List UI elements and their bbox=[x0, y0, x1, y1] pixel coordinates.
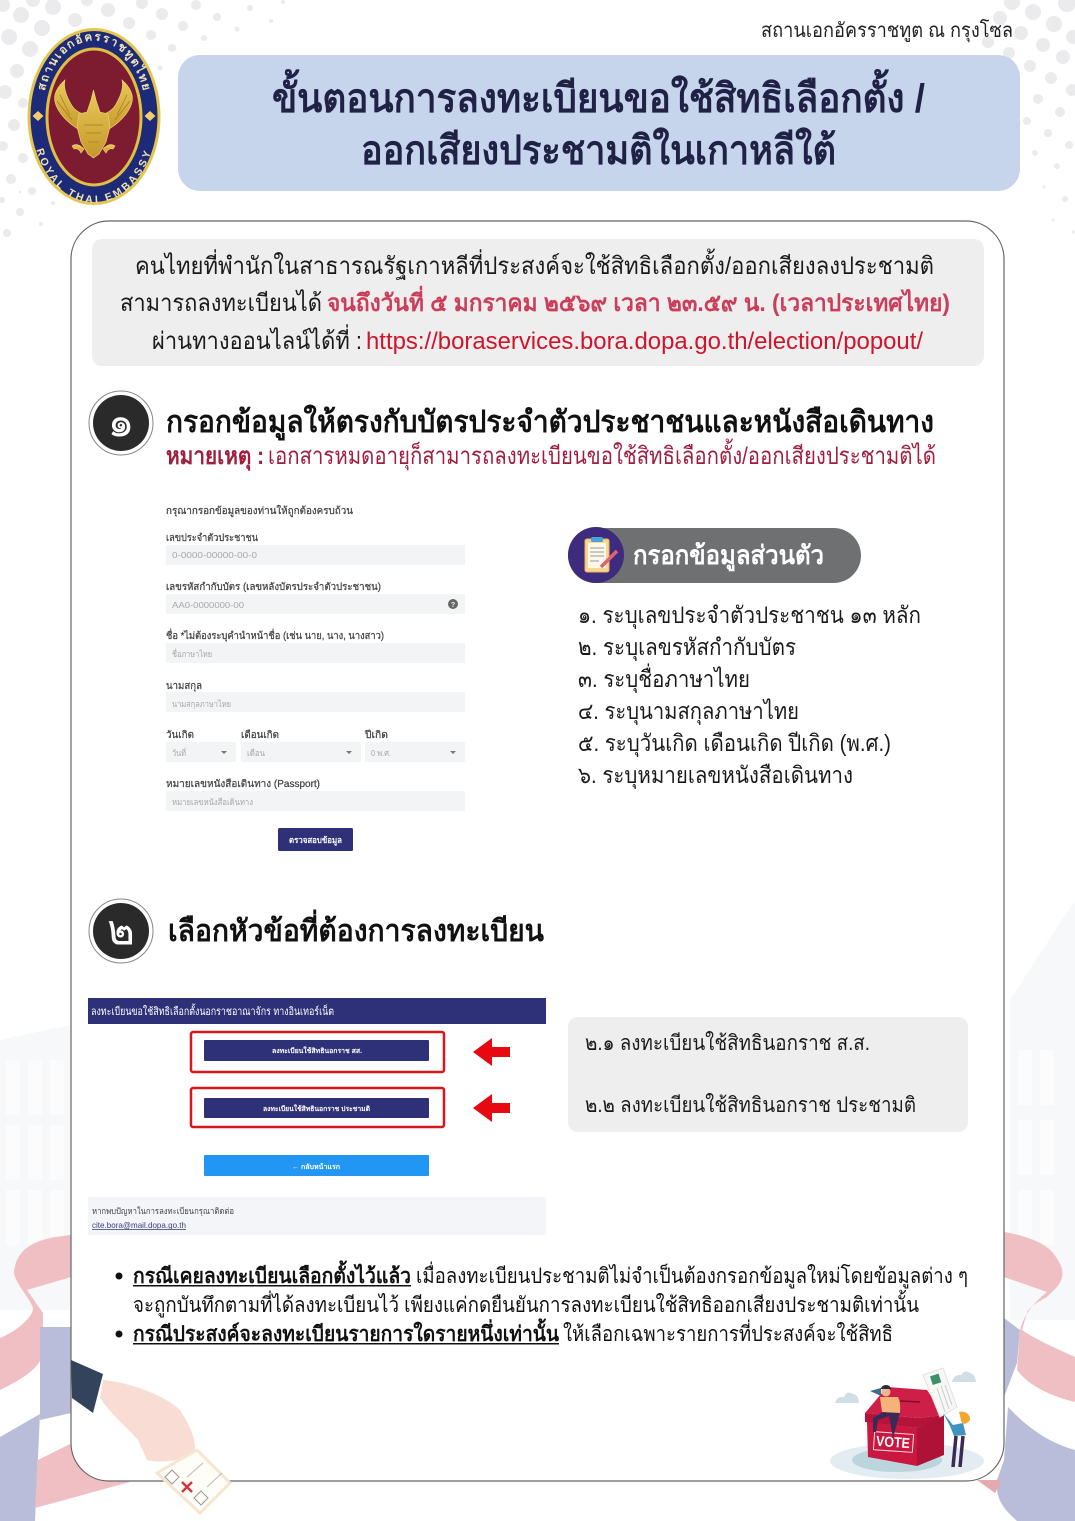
illustration: hand with ballot bbox=[71, 1360, 230, 1513]
intro box: สามารถลงทะเบียนได้ bbox=[120, 289, 322, 317]
registration screenshot: ← กลับหน้าแรก bbox=[292, 1162, 340, 1171]
form screenshot: นามสกุลภาษาไทย bbox=[172, 699, 231, 710]
embassy logo: ROYAL THAI EMBASSY bbox=[36, 148, 150, 203]
personal info list bbox=[578, 602, 921, 789]
options box: ๒.๒ ลงทะเบียนใช้สิทธินอกราช ประชามติ bbox=[585, 1093, 916, 1117]
title banner: ขั้นตอนการลงทะเบียนขอใช้สิทธิเลือกตั้ง / bbox=[272, 69, 925, 121]
notes: จะถูกบันทึกตามที่ได้ลงทะเบียนไว้ เพียงแค่กดยืนยันการลงทะเบียนใช้สิทธิออกเสียงประชามติเท่านั้น bbox=[133, 1290, 919, 1318]
intro box: https://boraservices.bora.dopa.go.th/election/popout/ bbox=[366, 328, 923, 355]
notes: ให้เลือกเฉพาะรายการที่ประสงค์จะใช้สิทธิ bbox=[563, 1319, 893, 1346]
registration screenshot: cite.bora@mail.dopa.go.th bbox=[92, 1220, 186, 1230]
registration screenshot: ลงทะเบียนขอใช้สิทธิเลือกตั้งนอกราชอาณาจักร ทางอินเทอร์เน็ต bbox=[91, 1003, 334, 1018]
registration screenshot: ลงทะเบียนใช้สิทธินอกราช ประชามติ bbox=[263, 1104, 370, 1113]
title banner: ออกเสียงประชามติในเกาหลีใต้ bbox=[361, 127, 836, 173]
garuda emblem bbox=[55, 80, 132, 158]
title banner bbox=[178, 55, 1020, 191]
form screenshot: วันเกิด bbox=[166, 730, 194, 741]
arrow 1 bbox=[473, 1038, 510, 1066]
background: faint buildings bbox=[0, 900, 1075, 1320]
form screenshot: ชื่อภาษาไทย bbox=[172, 648, 212, 659]
form screenshot: เลขประจำตัวประชาชน bbox=[166, 533, 258, 544]
illustration: vote box bbox=[830, 1368, 984, 1479]
step 2 badge: ๒ bbox=[107, 906, 135, 953]
notes: กรณีเคยลงทะเบียนเลือกตั้งไว้แล้ว bbox=[133, 1260, 411, 1288]
notes: เมื่อลงทะเบียนประชามติไม่จำเป็นต้องกรอกข้อมูลใหม่โดยข้อมูลต่าง ๆ bbox=[416, 1261, 968, 1289]
embassy logo: สถานเอกอัครราชทูตไทย bbox=[38, 33, 150, 90]
notes: กรณีประสงค์จะลงทะเบียนรายการใดรายหนึ่งเท่านั้น bbox=[133, 1318, 560, 1346]
step 1 note bbox=[166, 438, 936, 472]
personal info list: ๔. ระบุนามสกุลภาษาไทย bbox=[578, 698, 799, 725]
background: ribbon right bbox=[977, 1232, 1075, 1521]
personal info list: ๕. ระบุวันเกิด เดือนเกิด ปีเกิด (พ.ศ.) bbox=[578, 730, 891, 757]
step 1 note: เอกสารหมดอายุก็สามารถลงทะเบียนขอใช้สิทธิเลือกตั้ง/ออกเสียงประชามติได้ bbox=[268, 438, 936, 471]
background: ribbon left bbox=[0, 1235, 130, 1521]
registration screenshot: หากพบปัญหาในการลงทะเบียนกรุณาติดต่อ bbox=[92, 1206, 234, 1217]
form screenshot: เดือน bbox=[247, 748, 265, 758]
illustration: vote box: VOTE bbox=[875, 1434, 911, 1452]
ballot sheet bbox=[923, 1368, 957, 1417]
form screenshot: หมายเลขหนังสือเดินทาง bbox=[172, 797, 253, 807]
form screenshot: กรุณากรอกข้อมูลของท่านให้ถูกต้องครบถ้วน bbox=[166, 505, 353, 517]
intro box: จนถึงวันที่ ๕ มกราคม ๒๕๖๙ เวลา ๒๓.๕๙ น. (เวลาประเทศไทย) bbox=[327, 285, 950, 317]
form screenshot: 0-0000-00000-00-0 bbox=[172, 550, 257, 560]
personal info list: ๓. ระบุชื่อภาษาไทย bbox=[578, 663, 750, 693]
form screenshot bbox=[166, 505, 465, 851]
intro box: ผ่านทางออนไลน์ได้ที่ : bbox=[152, 324, 362, 355]
step 2 badge bbox=[89, 899, 153, 963]
person with ballot bbox=[943, 1413, 966, 1436]
arrow 2 bbox=[473, 1094, 510, 1122]
options box: ๒.๑ ลงทะเบียนใช้สิทธินอกราช ส.ส. bbox=[585, 1031, 870, 1055]
intro box: คนไทยที่พำนักในสาธารณรัฐเกาหลีที่ประสงค์จะใช้สิทธิเลือกตั้ง/ออกเสียงลงประชามติ bbox=[135, 248, 934, 280]
form screenshot: นามสกุล bbox=[166, 681, 202, 692]
registration screenshot bbox=[88, 998, 546, 1235]
personal info list: ๒. ระบุเลขรหัสกำกับบัตร bbox=[578, 634, 796, 661]
main card bbox=[71, 221, 1004, 1481]
form screenshot: ชื่อ *ไม่ต้องระบุคำนำหน้าชื่อ (เช่น นาย, นาง, นางสาว) bbox=[166, 628, 384, 642]
registration screenshot: ลงทะเบียนใช้สิทธินอกราช สส. bbox=[272, 1046, 362, 1055]
embassy logo bbox=[28, 28, 160, 205]
form screenshot: ตรวจสอบข้อมูล bbox=[289, 835, 342, 846]
form screenshot: เดือนเกิด bbox=[241, 729, 279, 741]
personal info pill: กรอกข้อมูลส่วนตัว bbox=[633, 540, 824, 572]
form screenshot: ปีเกิด bbox=[364, 729, 388, 741]
form screenshot: หมายเลขหนังสือเดินทาง (Passport) bbox=[166, 778, 320, 790]
step 1 heading: กรอกข้อมูลให้ตรงกับบัตรประจำตัวประชาชนและหนังสือเดินทาง bbox=[166, 404, 934, 441]
ballot paper bbox=[157, 1450, 230, 1513]
notes bbox=[116, 1260, 968, 1346]
intro box bbox=[92, 239, 984, 366]
personal info list: ๑. ระบุเลขประจำตัวประชาชน ๑๓ หลัก bbox=[578, 602, 921, 629]
step 1 badge: ๑ bbox=[108, 398, 134, 445]
person with megaphone bbox=[873, 1411, 900, 1438]
form screenshot: เลขรหัสกำกับบัตร (เลขหลังบัตรประจำตัวประชาชน) bbox=[166, 582, 381, 593]
form screenshot: วันที่ bbox=[172, 747, 186, 758]
icon: clipboard bbox=[585, 537, 617, 572]
top-right label: สถานเอกอัครราชทูต ณ กรุงโซล bbox=[761, 19, 1013, 43]
personal info list: ๖. ระบุหมายเลขหนังสือเดินทาง bbox=[578, 762, 853, 789]
form screenshot: 0 พ.ศ. bbox=[371, 748, 391, 758]
step 1 note: หมายเหตุ : bbox=[166, 443, 264, 472]
form screenshot: ? bbox=[451, 602, 455, 609]
form screenshot: AA0-0000000-00 bbox=[172, 600, 244, 610]
step 1 badge bbox=[89, 391, 153, 455]
options box bbox=[568, 1017, 968, 1132]
personal info pill bbox=[568, 527, 861, 583]
step 2 heading: เลือกหัวข้อที่ต้องการลงทะเบียน bbox=[168, 909, 544, 948]
clouds bbox=[835, 1371, 976, 1403]
